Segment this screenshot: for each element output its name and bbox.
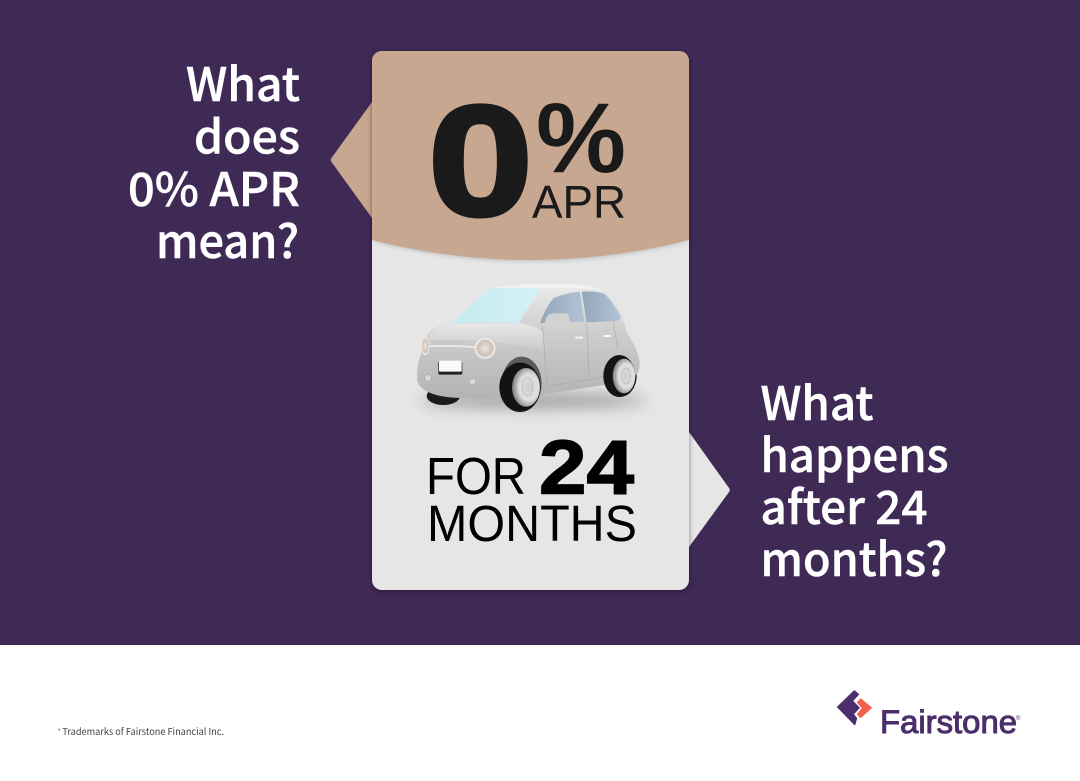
car illustration — [417, 283, 647, 412]
door handles — [576, 336, 610, 338]
logo mark: coral diamond — [857, 698, 872, 718]
grille line — [429, 346, 475, 347]
heading: what happens after 24 months: months? — [760, 524, 948, 590]
curve shadow — [372, 240, 689, 261]
car roof highlight — [490, 284, 603, 291]
left headlight — [421, 337, 429, 355]
far front wheel — [427, 387, 460, 405]
big zero: 0 — [428, 74, 533, 249]
rear wheel tyre backing — [603, 355, 637, 397]
card shadow — [371, 51, 690, 592]
right headlight — [475, 338, 495, 358]
arrow: left callout pointer — [331, 102, 372, 218]
wing mirror — [544, 313, 569, 326]
rear hub — [613, 359, 635, 393]
front side window — [540, 292, 584, 323]
text: for 24 months — [426, 426, 637, 552]
panel: offer card — [372, 51, 689, 590]
car body — [417, 283, 640, 399]
heading: what does 0% APR mean: 0% APR — [128, 154, 300, 220]
heading: what does 0% APR mean: does — [194, 102, 300, 168]
number plate — [438, 361, 462, 375]
heading: what does 0% APR mean: mean? — [156, 206, 299, 272]
car hood — [429, 323, 544, 350]
heading: what happens after 24 months — [760, 368, 948, 590]
logo registered mark: ® — [1016, 715, 1021, 722]
heading: what happens after 24 months: What — [760, 368, 874, 434]
heading: what does 0% APR mean — [128, 49, 300, 272]
APR label: APR — [532, 176, 626, 228]
front hub — [512, 368, 540, 407]
door lines — [543, 322, 618, 385]
fog lights — [425, 375, 431, 381]
percent sign: % — [536, 82, 626, 193]
front wheel arch — [502, 357, 542, 410]
card lower panel — [372, 51, 689, 590]
logo wordmark: Fairstone — [880, 704, 1017, 740]
trademark footnote: ® — [58, 728, 61, 734]
logo mark: purple diamond — [837, 690, 860, 726]
heading: what does 0% APR mean: What — [186, 49, 300, 115]
text: for 24 months: 24 — [539, 426, 634, 510]
logo: Fairstone — [837, 690, 1021, 740]
arrow: right callout pointer — [689, 432, 730, 547]
rear side window — [582, 291, 621, 322]
card upper tan panel — [372, 51, 689, 260]
trademark footnote: Trademarks of Fairstone Financial Inc. — [60, 724, 224, 738]
text: for 24 months: MONTHS — [427, 495, 637, 552]
windshield — [452, 288, 542, 323]
car shadow — [420, 394, 647, 407]
heading: what happens after 24 months: happens — [760, 420, 948, 486]
text: for 24 months: FOR — [426, 448, 526, 506]
heading: what happens after 24 months: after 24 — [760, 472, 928, 538]
front tyre — [499, 363, 541, 412]
rear tyre — [603, 355, 635, 397]
